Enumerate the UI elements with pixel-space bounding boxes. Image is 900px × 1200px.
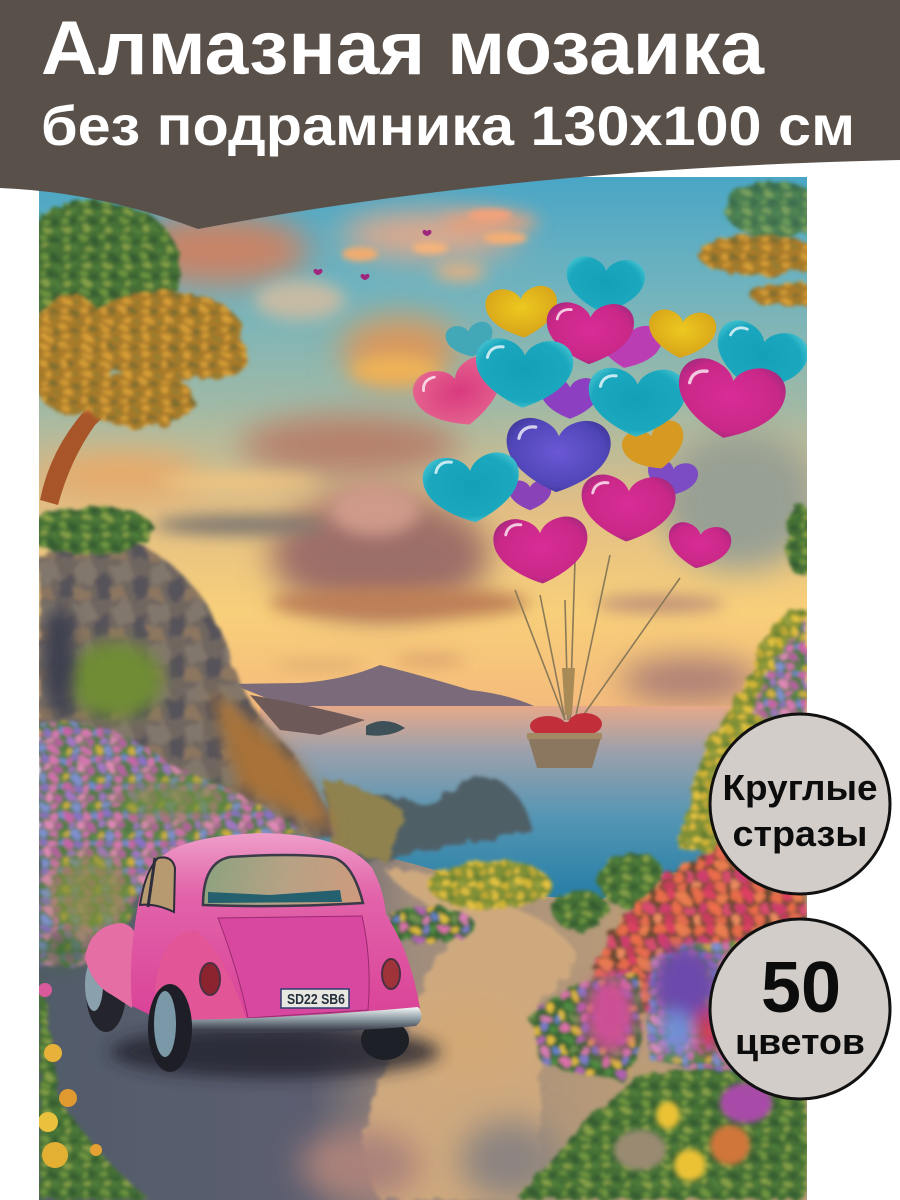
chrome bumper	[182, 1007, 422, 1033]
magenta heart right	[670, 354, 789, 447]
badge: 50 colours: 50	[761, 948, 841, 1028]
header banner	[0, 0, 900, 229]
car shadow	[110, 1026, 440, 1078]
yellow heart right	[646, 308, 717, 361]
title: Алмазная мозаика	[41, 6, 765, 91]
far front wheel	[85, 966, 125, 1032]
mid shore bushes	[375, 852, 666, 943]
teal heart lower left	[421, 450, 523, 527]
right tree top	[695, 178, 807, 578]
teal heart centre	[474, 337, 574, 410]
car body	[131, 833, 420, 1025]
rocks and shore	[250, 695, 533, 862]
magenta heart lower	[579, 473, 677, 544]
right flower bushes	[520, 610, 807, 1200]
magenta heart bottom	[492, 515, 590, 586]
left flower slope	[39, 723, 300, 965]
rear window	[203, 855, 363, 906]
badge: 50 colours: цветов	[735, 1021, 865, 1062]
license plate: SD22 SB6	[287, 991, 345, 1008]
right blue and purple blooms	[584, 947, 720, 1055]
small distant hearts	[314, 230, 431, 280]
balloon ropes	[515, 555, 680, 720]
left tail light	[200, 963, 220, 995]
flower basket	[527, 668, 602, 768]
left foreground flowers	[38, 970, 150, 1200]
teal heart right	[707, 316, 812, 402]
sky	[39, 177, 807, 737]
sea	[260, 706, 732, 900]
gold heart	[619, 417, 692, 478]
right tail light	[382, 959, 400, 989]
badge: round rhinestones	[710, 714, 890, 894]
front fender	[85, 923, 136, 1008]
teal heart top	[566, 256, 645, 310]
clouds	[40, 209, 820, 702]
pink heart left	[408, 351, 512, 438]
winding road	[300, 870, 576, 1200]
ground base	[39, 845, 807, 1200]
heart balloons	[408, 255, 812, 586]
small magenta heart	[665, 520, 733, 573]
trunk lid	[218, 916, 369, 1018]
distant mountain	[238, 665, 534, 706]
subtitle: без подрамника 130х100 см	[41, 94, 855, 157]
rear fender shading	[155, 930, 246, 1025]
magenta heart upper	[545, 302, 635, 366]
teal heart mid right	[587, 367, 687, 438]
badge: 50 colours	[710, 919, 890, 1099]
bottom right blossoms	[614, 1083, 772, 1181]
pink car	[85, 833, 440, 1078]
left cliff	[25, 506, 338, 850]
foliage shading on slope	[41, 782, 230, 966]
left tree	[39, 197, 250, 505]
illustration: car and balloons scene	[10, 177, 830, 1200]
badge: round rhinestones: стразы	[732, 813, 868, 854]
badge: round rhinestones: Круглые	[722, 767, 878, 808]
near rear wheel	[148, 984, 192, 1072]
right rear wheel	[361, 1027, 409, 1060]
purple heart centre	[504, 417, 612, 495]
car seats	[208, 890, 342, 903]
side windows	[140, 857, 175, 912]
yellow heart left	[485, 286, 557, 338]
